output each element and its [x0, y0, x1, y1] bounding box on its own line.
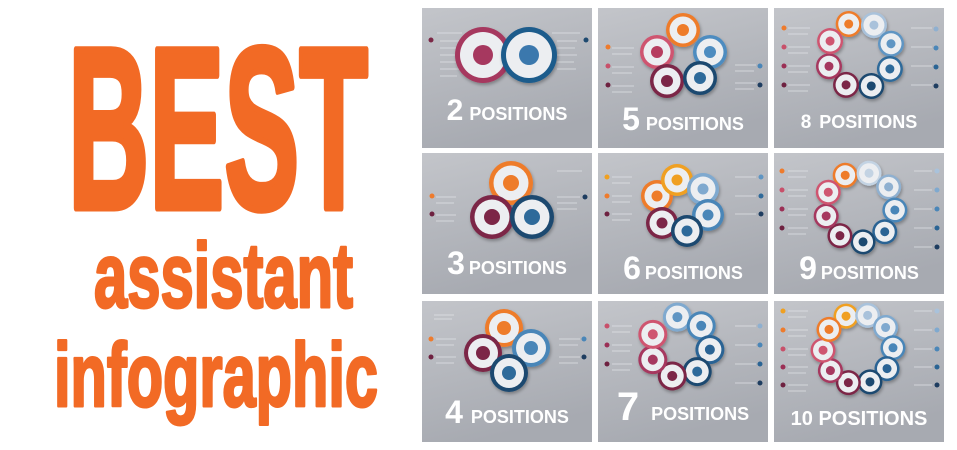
label: 7 POSITIONS — [617, 385, 749, 429]
panel: 2 positions — [422, 8, 592, 148]
label: 2 POSITIONS — [447, 94, 567, 127]
panel: 9 positions — [774, 153, 944, 294]
ring of 7 icons — [634, 301, 726, 394]
ring of 5 icons — [640, 13, 727, 98]
panel: 8 positions — [774, 7, 944, 148]
label: 10 POSITIONS — [791, 408, 927, 430]
label: 4 POSITIONS — [445, 394, 569, 430]
subtitle: assistant: assistant — [94, 225, 353, 327]
ring of 8 icons — [812, 7, 908, 103]
panel: 6 positions — [598, 153, 768, 294]
label: 8 POSITIONS — [801, 112, 917, 133]
label: 3POSITIONS — [447, 245, 567, 281]
label: 5 POSITIONS — [622, 101, 744, 137]
panel: 5 positions — [598, 8, 768, 148]
ring of 9 icons — [811, 158, 908, 255]
ring of 4 icons — [464, 309, 550, 392]
panel: 4 positions — [422, 301, 592, 442]
icon: maroon circle — [455, 27, 511, 83]
ring of 10 icons — [810, 300, 906, 398]
label: 6POSITIONS — [623, 250, 743, 286]
panel: 10 positions — [774, 300, 944, 442]
subtitle: infographic: infographic — [54, 326, 378, 426]
icon: blue circle — [501, 27, 557, 83]
label: 9POSITIONS — [799, 250, 919, 286]
ring of 3 icons — [470, 161, 554, 239]
panel: 3 positions — [422, 153, 592, 294]
panel: 7 positions — [598, 301, 768, 442]
ring of 6 icons — [641, 164, 724, 247]
text: BEST — [68, 0, 368, 257]
